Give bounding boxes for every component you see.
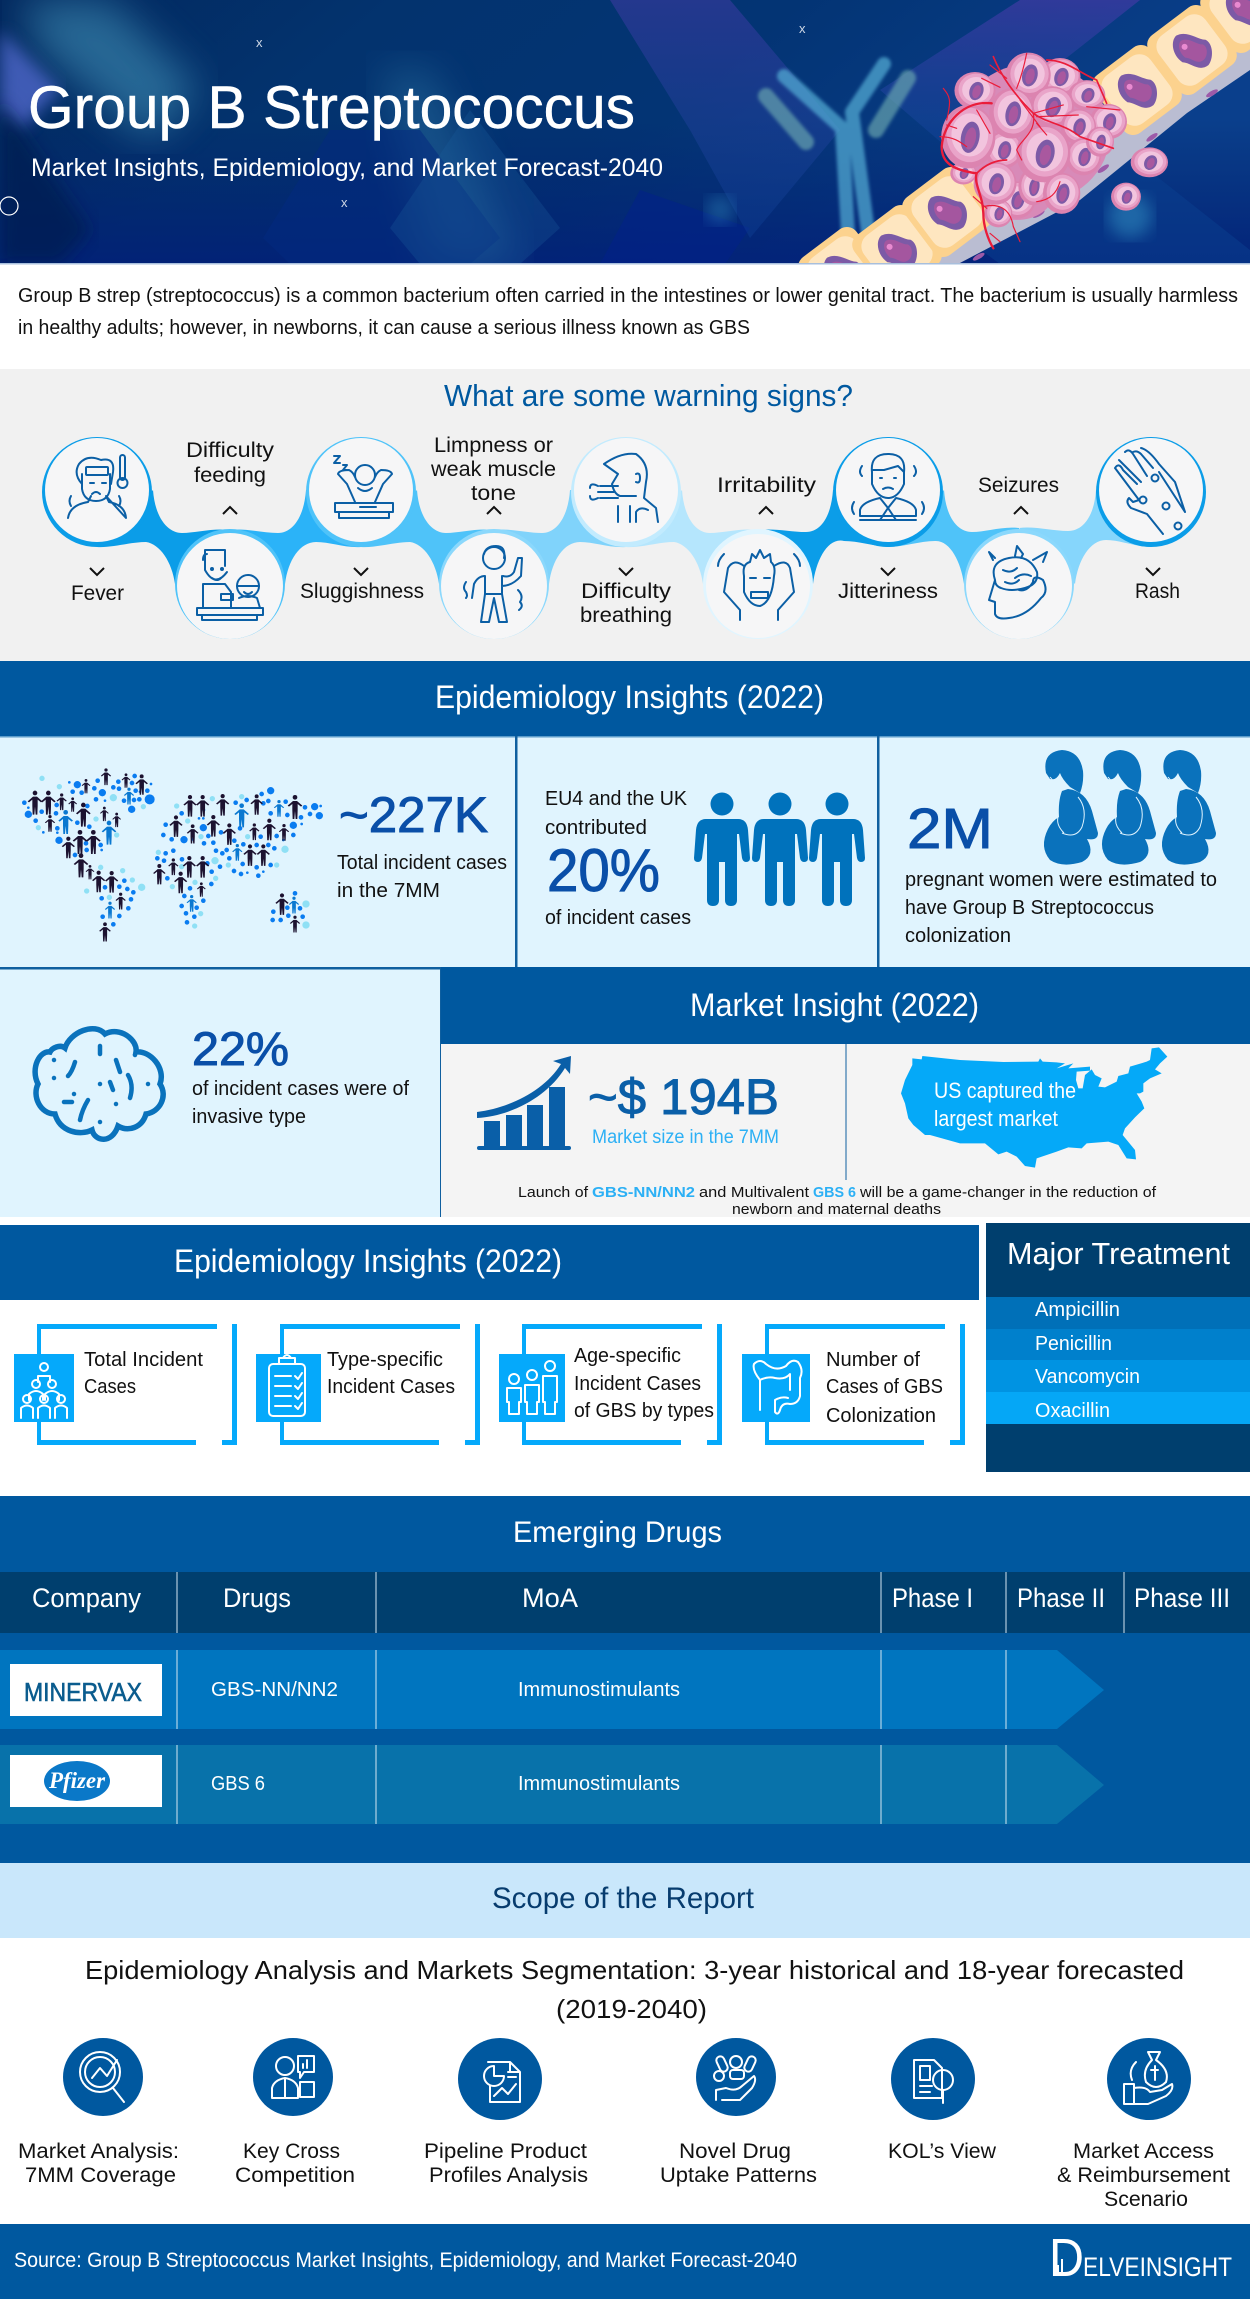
treatment: vancomycin: [986, 1360, 1250, 1392]
stat: 2M pregnant women: [905, 797, 1217, 947]
icon: document with magnifier: [914, 2060, 953, 2103]
circle: seizures: [964, 529, 1074, 639]
scope: pipeline product profiles: Profiles Analysis: [429, 2164, 588, 2187]
map caption: largest market: [934, 1106, 1058, 1131]
stat: EU4 and UK 20 percent: EU4 and the UK: [545, 788, 688, 810]
map: United States: [901, 1047, 1167, 1168]
warning sign labels: Fever: [71, 582, 124, 605]
stat: EU4 and UK 20 percent: of incident cases: [545, 907, 691, 929]
icon: hand with money bag: [1124, 2052, 1172, 2104]
footer: [0, 2224, 1250, 2299]
icon: fever: [68, 455, 128, 518]
scope: pipeline product profiles: Pipeline Product: [424, 2140, 587, 2163]
scope: market access and reimbursement: [1057, 2038, 1230, 2211]
map caption: [934, 1078, 1076, 1131]
card: total incident cases: [14, 1324, 237, 1445]
heading band: epidemiology insights: Epidemiology Insights (2022): [435, 679, 824, 715]
banner: header background and artwork: [0, 0, 1250, 263]
intro text: [18, 285, 1238, 339]
warning sign labels: Difficulty: [186, 439, 275, 462]
circle: sluggishness: [306, 437, 416, 547]
card: age-specific incident cases: Age-specific: [574, 1345, 681, 1367]
card: cases of GBS colonization: Colonization: [826, 1405, 936, 1427]
panel: major treatment: [986, 1223, 1250, 1472]
stat: 194B market size: [588, 1069, 779, 1148]
scope: key cross competition: Competition: [235, 2164, 355, 2187]
circle: limpness: [439, 529, 549, 639]
table header row: Company: [32, 1583, 141, 1613]
scope: KOL's view: [888, 2038, 997, 2163]
heading band: market insight: Market Insight (2022): [690, 987, 979, 1023]
panel: emerging drugs: [0, 1496, 1250, 1863]
warning sign labels: breathing: [580, 604, 672, 627]
stat: 227K total incident cases: ~227K: [339, 787, 488, 843]
icon: antibody: [766, 64, 908, 234]
source line: Source: Group B Streptococcus Market Insights, Epidemiology, and Market Forecast-2040: [14, 2249, 797, 2272]
decorative cross and circle marks: x: [256, 35, 263, 50]
circle: irritability: [703, 529, 813, 639]
world map of people: [24, 768, 321, 942]
warning sign labels: tone: [471, 482, 516, 505]
warning sign labels: Sluggishness: [300, 580, 424, 603]
stat: 227K total incident cases: [337, 787, 507, 902]
table header row: [0, 1572, 1250, 1633]
warning sign labels: Difficulty: [581, 580, 672, 603]
card: age-specific incident cases: [499, 1324, 722, 1445]
treatment: oxacillin: Oxacillin: [1035, 1400, 1110, 1422]
title: Group B Streptococcus: [28, 74, 635, 141]
card: total incident cases: Cases: [84, 1376, 136, 1398]
stat: 22 percent invasive: of incident cases were of: [192, 1078, 409, 1100]
table header row: Phase I: [892, 1583, 973, 1613]
scope: KOL's view: KOL’s View: [888, 2140, 997, 2163]
drug row: GBS-NN/NN2: [0, 1650, 1104, 1729]
icon: sleeping: [334, 456, 393, 518]
stat: 22 percent invasive: 22%: [192, 1022, 289, 1075]
card: cases of GBS colonization: Number of: [826, 1349, 920, 1371]
callout: game-changer note: Launch of: [518, 1184, 589, 1201]
card: cases of GBS colonization: [742, 1324, 965, 1445]
panel: invasive type stat: [0, 967, 442, 1217]
intro text: in healthy adults; however, in newborns, it can cause a serious illness known as GBS: [18, 317, 750, 339]
icon: magnifier chart: [80, 2052, 124, 2102]
warning sign labels: feeding: [194, 464, 266, 487]
scope: market analysis: [18, 2038, 179, 2187]
table header row: Drugs: [223, 1583, 291, 1613]
icon: clipboard checklist: [269, 1355, 305, 1416]
callout: game-changer note: will be a game-changer in the reduction of: [859, 1184, 1157, 1201]
heading: warning signs: What are some warning signs?: [444, 378, 853, 413]
stat: 194B market size: ~$ 194B: [588, 1069, 779, 1125]
card: type-specific incident cases: [256, 1324, 480, 1445]
card: type-specific incident cases: Incident Cases: [327, 1376, 455, 1398]
heading band: scope of the report: Scope of the Report: [492, 1882, 755, 1915]
logo: Pfizer: [10, 1755, 162, 1807]
icon: breathing: [590, 454, 658, 522]
icon: jittery man: [852, 454, 924, 520]
table header row: Phase III: [1134, 1583, 1230, 1613]
drug row: GBS-NN/NN2: Immunostimulants: [518, 1679, 680, 1701]
scope description: [85, 1955, 1184, 2024]
stat: EU4 and UK 20 percent: contributed: [545, 817, 647, 839]
wave connector: [97, 490, 1151, 584]
scope: key cross competition: Key Cross: [243, 2140, 340, 2163]
treatment: penicillin: Penicillin: [1035, 1333, 1112, 1355]
heading band: scope of the report: [0, 1863, 1250, 1938]
logo: Minervax: [10, 1664, 162, 1716]
logo: DelveInsight: D: [1049, 2228, 1084, 2288]
scope: market access and reimbursement: Market Access: [1073, 2140, 1214, 2163]
treatment: ampicillin: [986, 1297, 1250, 1329]
drug row: GBS 6: [0, 1745, 1104, 1824]
callout: game-changer note: newborn and maternal deaths: [732, 1201, 941, 1218]
card: age-specific incident cases: Incident Cases: [574, 1373, 701, 1395]
stat: 2M pregnant women: pregnant women were estimated to: [905, 869, 1217, 891]
logo: Pfizer: Pfizer: [48, 1768, 106, 1793]
stat: EU4 and UK 20 percent: 20%: [547, 837, 660, 904]
table header row: Phase II: [1017, 1583, 1105, 1613]
icon: three people: [694, 792, 865, 906]
scope description: (2019-2040): [556, 1994, 707, 2024]
treatment: ampicillin: Ampicillin: [1035, 1299, 1120, 1321]
stat: 2M pregnant women: colonization: [905, 925, 1011, 947]
stat: 227K total incident cases: Total incident cases: [337, 852, 507, 874]
stat: 2M pregnant women: have Group B Streptococcus: [905, 897, 1154, 919]
scope: market access and reimbursement: & Reimbursement: [1057, 2164, 1230, 2187]
warning sign labels: Limpness or: [434, 434, 553, 457]
callout: game-changer note: GBS 6: [813, 1184, 856, 1201]
warning sign labels: Irritability: [717, 474, 817, 497]
icon: bacteria cloud: [35, 1029, 163, 1139]
drug row: GBS 6: GBS 6: [211, 1773, 265, 1795]
panel: warning signs: [0, 369, 1250, 661]
icon: family by age: [507, 1361, 557, 1414]
treatment: vancomycin: Vancomycin: [1035, 1366, 1140, 1388]
warning sign labels: Seizures: [978, 474, 1059, 497]
card: type-specific incident cases: Type-specific: [327, 1349, 443, 1371]
logo: Minervax: MINERVAX: [24, 1677, 142, 1707]
warning sign labels: Jitteriness: [838, 580, 938, 603]
heading band: epidemiology insights: [0, 661, 1250, 736]
circle: jitteriness: [833, 437, 943, 547]
decorative cross and circle marks: [0, 21, 806, 215]
icon: people group: [21, 1363, 67, 1418]
callout: game-changer note: and Multivalent: [699, 1184, 810, 1201]
panel: market insight: [441, 967, 1250, 1218]
heading band: market insight: [441, 967, 1250, 1044]
circle: fever: [42, 437, 152, 547]
callout: game-changer note: GBS-NN/NN2: [592, 1184, 695, 1201]
stat: 194B market size: Market size in the 7MM: [592, 1127, 779, 1148]
scope: market analysis: Market Analysis:: [18, 2140, 179, 2163]
icon: irritated head: [718, 550, 800, 620]
subtitle: Market Insights, Epidemiology, and Market Forecast-2040: [31, 154, 663, 182]
map caption: US captured the: [934, 1078, 1076, 1103]
illustration: epithelial wall and tumour cells: [798, 0, 1250, 263]
stat: 22 percent invasive: invasive type: [192, 1106, 306, 1128]
icon: limp figure: [464, 546, 522, 622]
decorative cross and circle marks: x: [799, 21, 806, 36]
scope description: Epidemiology Analysis and Markets Segmentation: 3-year historical and 18-year forecasted: [85, 1955, 1184, 1985]
circle: difficulty breathing: [571, 437, 681, 547]
icon: feeding: [197, 550, 263, 620]
panel: epidemiology stats row: [0, 736, 1250, 967]
warning sign labels: [71, 434, 1180, 627]
drug row: GBS 6: Immunostimulants: [518, 1773, 680, 1795]
icon: businessman with charts: [272, 2056, 314, 2098]
scope: market analysis: 7MM Coverage: [25, 2164, 176, 2187]
warning sign labels: Rash: [1135, 580, 1180, 603]
scope: novel drug uptake: Novel Drug: [679, 2140, 791, 2163]
stat: 2M pregnant women: 2M: [907, 797, 993, 861]
treatment: oxacillin: [986, 1392, 1250, 1424]
scope: market access and reimbursement: Scenario: [1104, 2188, 1188, 2211]
circle: rash: [1096, 437, 1206, 547]
icon: rising bar chart: [477, 1056, 571, 1150]
logo: DelveInsight: [1049, 2228, 1232, 2288]
heading: major treatment: Major Treatment: [1007, 1236, 1230, 1271]
stat: EU4 and UK 20 percent: [545, 788, 691, 929]
scope: pipeline product profiles: [424, 2038, 588, 2187]
icon: hand with pills: [714, 2055, 757, 2100]
callout: game-changer note: [518, 1184, 1157, 1218]
decorative cross and circle marks: x: [341, 195, 348, 210]
table header row: MoA: [522, 1583, 578, 1613]
stat: 227K total incident cases: in the 7MM: [337, 880, 440, 902]
panel: epidemiology segments: [0, 1225, 979, 1445]
drug row: GBS-NN/NN2: GBS-NN/NN2: [211, 1679, 338, 1701]
chevrons: warning sign pointers: [90, 507, 1160, 575]
icon: rash hand: [1115, 448, 1185, 534]
circle: difficulty feeding: [175, 529, 285, 639]
stat: 22 percent invasive: [192, 1022, 409, 1128]
icon: seizure brain: [989, 546, 1047, 618]
scope: novel drug uptake: Uptake Patterns: [660, 2164, 817, 2187]
scope: key cross competition: [235, 2038, 355, 2187]
card: cases of GBS colonization: Cases of GBS: [826, 1376, 943, 1398]
card: age-specific incident cases: of GBS by types: [574, 1400, 714, 1422]
treatment: penicillin: [986, 1329, 1250, 1360]
heading: emerging drugs: Emerging Drugs: [513, 1516, 722, 1549]
icon: report with charts: [484, 2062, 520, 2102]
icon: intestine: [754, 1361, 802, 1414]
heading band: epidemiology insights segments: Epidemiology Insights (2022): [174, 1243, 562, 1279]
intro text: Group B strep (streptococcus) is a common bacterium often carried in the intestines or lower genital tract. The bacterium is usually harmless: [18, 285, 1238, 307]
card: total incident cases: Total Incident: [84, 1349, 203, 1371]
scope: novel drug uptake: [660, 2038, 817, 2187]
warning sign labels: weak muscle: [430, 458, 556, 481]
icon: pregnant women: [1044, 750, 1216, 865]
heading band: epidemiology insights segments: [0, 1225, 979, 1300]
